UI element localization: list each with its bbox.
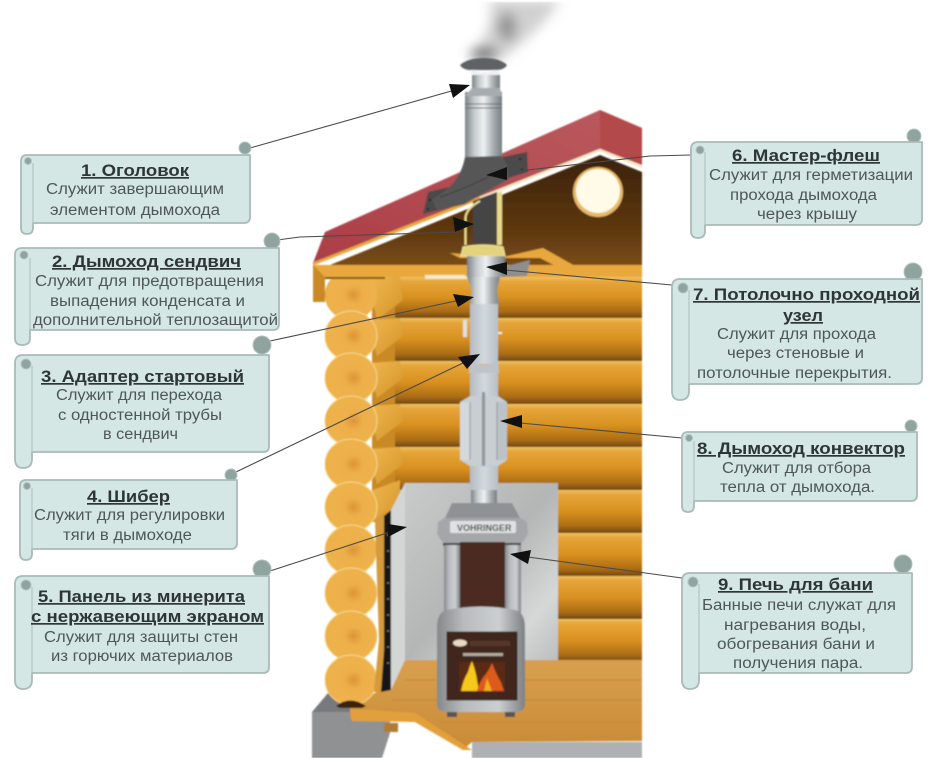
log ends on left corner [325, 270, 403, 708]
attic floor beam [313, 248, 642, 302]
arrow 9: stove [510, 550, 682, 578]
description 7: потолочные перекрытия. [697, 365, 892, 382]
heading 7: узел [783, 306, 823, 325]
callout 3: adapter [15, 336, 271, 468]
callout 1: cap [21, 142, 251, 234]
arrow 5: panel [270, 524, 407, 571]
heading 5 [31, 587, 264, 626]
heading 9: 9. Печь для бани [718, 575, 873, 594]
arrow 1: cap [250, 84, 470, 148]
foundation [312, 693, 642, 758]
arrow 6: master flash [486, 155, 691, 180]
heading 3: 3. Адаптер стартовый [41, 367, 244, 386]
callout 9: stove [682, 555, 912, 689]
description 5: из горючих материалов [51, 648, 233, 665]
description 6: через крышу [757, 206, 857, 223]
description 9: Банные печи служат для [702, 597, 896, 614]
heading 4: 4. Шибер [87, 487, 170, 506]
illustration: bathhouse cross-section [312, 0, 642, 758]
heading 1: 1. Оголовок [81, 161, 190, 180]
description 2 [33, 273, 278, 329]
description 3: с одностенной трубы [58, 407, 222, 424]
arrow 3: adapter [270, 294, 474, 341]
description 8 [720, 460, 875, 496]
callout 5: panel [15, 560, 271, 689]
convector pipe [460, 392, 507, 510]
heading 6: 6. Мастер-флеш [732, 146, 880, 165]
description 2: выпадения конденсата и [50, 293, 245, 310]
callout 8: convector [682, 420, 917, 512]
mineral panel with steel screen [381, 483, 558, 692]
description 9 [702, 597, 896, 672]
arrow 4: damper [236, 354, 480, 472]
description 9: обогревания бани и [717, 636, 875, 653]
description 9: нагревания воды, [724, 617, 866, 634]
description 7 [697, 326, 892, 382]
description 5 [44, 629, 238, 665]
heading 2: 2. Дымоход сендвич [52, 252, 241, 271]
description 9: получения пара. [733, 655, 863, 672]
lower flue pipe with damper [463, 304, 502, 400]
red roof [313, 110, 642, 264]
heading 8: 8. Дымоход конвектор [697, 439, 905, 458]
heading 5: 5. Панель из минерита [38, 587, 246, 606]
arrow 7: ceiling node [486, 262, 672, 285]
ceiling pass-through [425, 245, 530, 278]
attic interior [330, 155, 642, 265]
log wall [372, 277, 642, 662]
heading 7: 7. Потолочно проходной [693, 285, 920, 304]
description 1 [46, 181, 224, 219]
sauna stove: VOHRINGER [457, 523, 512, 533]
arrow 8: convector [500, 415, 682, 438]
smoke [470, 0, 560, 61]
arrow 2: sandwich pipe [277, 217, 474, 240]
callout 7: ceiling node [672, 263, 922, 400]
floor [350, 660, 642, 750]
description 4: Служит для регулировки [34, 507, 225, 524]
sauna stove [437, 503, 528, 717]
starter adapter [467, 277, 500, 305]
description 6: прохода дымохода [730, 187, 877, 204]
description 4 [34, 507, 225, 544]
description 4: тяги в дымоходе [63, 527, 192, 544]
description 7: через стеновые и [727, 345, 864, 362]
description 2: дополнительной теплозащитой [33, 312, 278, 329]
master flash [423, 152, 528, 214]
sandwich pipe in attic [466, 191, 502, 245]
description 6: Служит для герметизации [709, 167, 913, 184]
heading 5: с нержавеющим экраном [31, 607, 264, 626]
callout 6: master flash [691, 129, 922, 238]
description 8: тепла от дымохода. [720, 479, 875, 496]
chimney cap [460, 58, 507, 158]
description 3 [56, 387, 222, 443]
description 3: Служит для перехода [56, 387, 222, 404]
description 1: Служит завершающим [46, 181, 224, 198]
description 1: элементом дымохода [50, 202, 220, 219]
description 5: Служит для защиты стен [44, 629, 238, 646]
description 8: Служит для отбора [722, 460, 871, 477]
description 6 [709, 167, 913, 223]
callout 4: damper [20, 469, 237, 560]
description 7: Служит для прохода [717, 326, 876, 343]
description 2: Служит для предотвращения [35, 273, 264, 290]
heading 7 [693, 285, 920, 325]
description 3: в сендвич [103, 426, 178, 443]
callout 2: sandwich pipe [15, 233, 280, 345]
